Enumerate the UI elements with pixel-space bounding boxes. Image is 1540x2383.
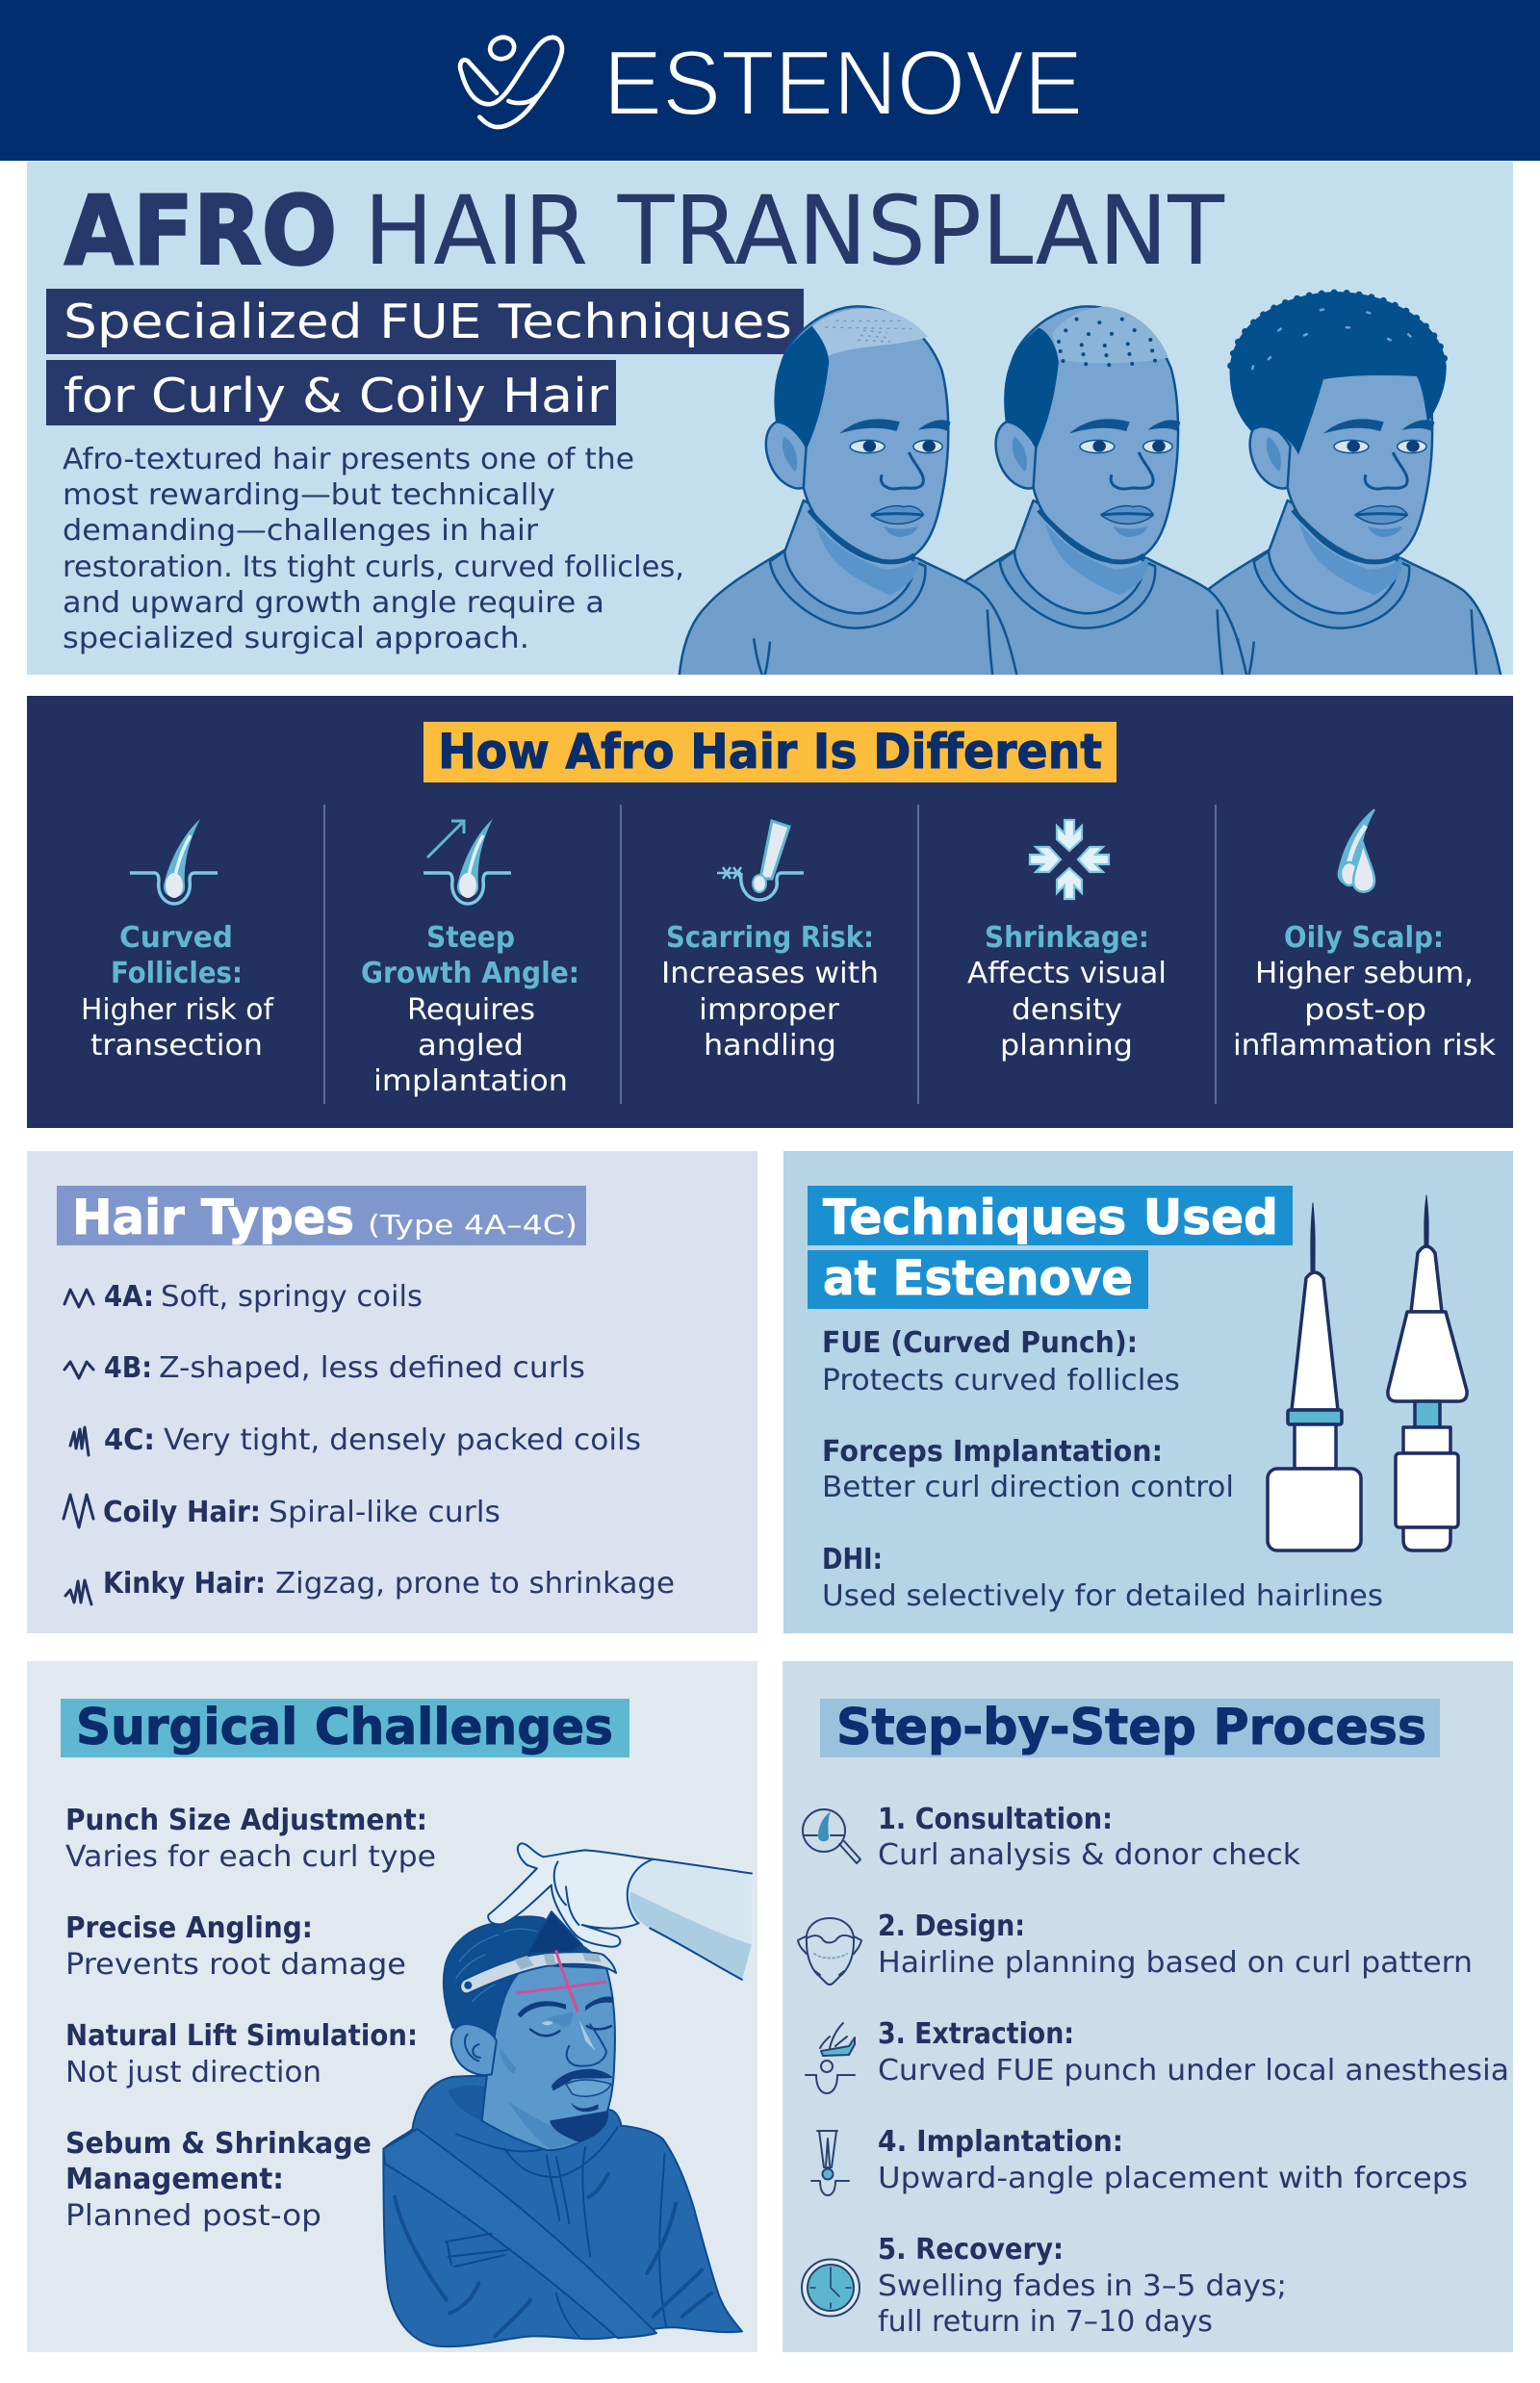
heading: Techniques Used <box>823 1190 1278 1245</box>
text: handling <box>704 1029 836 1063</box>
step 2: design: 2. Design: <box>878 1909 1025 1943</box>
item: sebum and shrinkage: Sebum & Shrinkage <box>65 2127 372 2161</box>
subtitle text: Specialized FUE Techniques <box>64 295 792 349</box>
step 4: implantation: Upward-angle placement with forceps <box>878 2162 1468 2195</box>
intro paragraph: most rewarding—but technically <box>63 478 555 512</box>
hoodie <box>383 2076 742 2346</box>
step 2: design <box>798 1909 1473 1985</box>
icon: angled follicle with arrow <box>424 819 511 904</box>
subtitle text: for Curly & Coily Hair <box>64 369 609 423</box>
panel: hair types <box>27 1151 757 1633</box>
text: planning <box>1000 1029 1133 1063</box>
heading: Step-by-Step Process <box>836 1699 1426 1756</box>
item: 4B: 4B: <box>104 1351 152 1385</box>
step 5: recovery <box>802 2233 1287 2339</box>
panel: techniques used <box>783 1151 1513 1633</box>
item: punch size: Punch Size Adjustment: <box>65 1804 427 1837</box>
item: kinky hair: Kinky Hair: <box>103 1567 266 1601</box>
text: Oily Scalp: <box>1284 921 1444 955</box>
icon: hair with oil drop <box>1339 809 1374 892</box>
brand name: ESTENOVE <box>603 32 1083 135</box>
text: angled <box>418 1029 524 1063</box>
text: Steep <box>426 921 515 955</box>
text: Curved <box>119 921 233 955</box>
icon: punch tool <box>1268 1203 1361 1550</box>
technique: FUE: FUE (Curved Punch): <box>822 1326 1138 1360</box>
heading: (Type 4A–4C) <box>368 1209 578 1241</box>
item: punch size <box>65 1804 436 1874</box>
face and neck <box>444 1916 615 2150</box>
item: sebum and shrinkage: Management: <box>65 2163 284 2196</box>
icon: exclamation over follicle with scar <box>717 821 804 900</box>
text: Affects visual <box>967 957 1167 990</box>
icon: head with hairline plan <box>798 1918 861 1985</box>
text: density <box>1012 993 1122 1027</box>
item: punch size: Varies for each curl type <box>65 1840 436 1874</box>
icon: curved follicle <box>130 819 218 904</box>
step 5: recovery: 5. Recovery: <box>878 2233 1064 2267</box>
step 1: consultation: 1. Consultation: <box>878 1803 1113 1836</box>
column: scarring risk <box>661 821 879 1063</box>
icon: implanter tool <box>1388 1195 1467 1550</box>
heading: at Estenove <box>823 1250 1133 1306</box>
text <box>967 921 1167 1063</box>
column: steep growth angle <box>361 819 579 1098</box>
step 1: consultation <box>803 1803 1301 1872</box>
item: natural lift: Natural Lift Simulation: <box>65 2019 418 2053</box>
technique: DHI: DHI: <box>822 1543 883 1576</box>
item: precise angling: Precise Angling: <box>65 1911 313 1945</box>
title: AFRO <box>64 176 337 287</box>
item: 4C: 4C: <box>104 1423 155 1457</box>
text: implantation <box>373 1064 568 1098</box>
text <box>1233 921 1497 1063</box>
heading: Surgical Challenges <box>76 1699 613 1756</box>
text <box>361 921 579 1098</box>
intro paragraph: specialized surgical approach. <box>63 622 529 655</box>
technique: DHI: Used selectively for detailed hairlines <box>822 1579 1383 1613</box>
icon: four inward arrows <box>1030 820 1109 899</box>
item: coily hair: Coily Hair: <box>103 1496 261 1529</box>
icon: implanter placing graft <box>811 2131 849 2195</box>
intro paragraph: demanding—challenges in hair <box>63 514 539 548</box>
step 4: implantation: 4. Implantation: <box>878 2125 1123 2159</box>
step 3: extraction <box>806 2017 1509 2093</box>
heading <box>808 1186 1293 1309</box>
text: Scarring Risk: <box>666 921 874 955</box>
step 3: extraction: 3. Extraction: <box>878 2017 1074 2051</box>
step 4: implantation <box>811 2125 1468 2195</box>
illustration: three men showing hair density stages <box>680 293 1502 677</box>
column: oily scalp <box>1233 809 1497 1063</box>
text: inflammation risk <box>1233 1029 1497 1063</box>
item: sebum and shrinkage: Planned post-op <box>65 2199 321 2233</box>
technique: forceps: Forceps Implantation: <box>822 1435 1163 1469</box>
icon: Estenove logo mark <box>460 34 562 127</box>
step 2: design: Hairline planning based on curl pattern <box>878 1946 1473 1980</box>
header banner <box>0 0 1540 161</box>
item: sebum and shrinkage <box>65 2127 372 2233</box>
text <box>81 921 274 1063</box>
icon: magnifier on follicle <box>803 1809 860 1863</box>
title: HAIR TRANSPLANT <box>364 176 1225 287</box>
item: natural lift: Not just direction <box>65 2056 321 2089</box>
step 5: recovery: full return in 7–10 days <box>878 2305 1213 2339</box>
headband <box>460 1952 616 1993</box>
gloved hand and sleeve <box>488 1843 752 1980</box>
item: precise angling <box>65 1911 406 1982</box>
column: curved follicles <box>81 819 274 1063</box>
illustration: patient with gloved hand measuring hairline <box>383 1843 752 2346</box>
icon: clock <box>802 2260 860 2316</box>
item: kinky hair <box>65 1567 675 1604</box>
text: Shrinkage: <box>985 921 1149 955</box>
heading: Hair Types <box>72 1190 354 1245</box>
text: improper <box>699 993 840 1027</box>
text: Higher risk of <box>81 993 274 1027</box>
item: coily hair <box>64 1495 500 1529</box>
text: post-op <box>1304 993 1426 1027</box>
item: 4A: Soft, springy coils <box>161 1280 423 1314</box>
text: Follicles: <box>111 957 243 990</box>
column dividers <box>324 805 1216 1104</box>
panel: surgical challenges <box>27 1661 757 2352</box>
item: 4B: Z-shaped, less defined curls <box>159 1351 585 1385</box>
technique: forceps: Better curl direction control <box>822 1471 1234 1504</box>
step 1: consultation: Curl analysis & donor check <box>878 1838 1301 1872</box>
heading: How Afro Hair Is Different <box>438 724 1102 780</box>
item: kinky hair: Zigzag, prone to shrinkage <box>275 1567 675 1601</box>
text <box>661 921 879 1063</box>
figure: receding hair and bald crown <box>680 306 1017 677</box>
technique: FUE: Protects curved follicles <box>822 1364 1180 1397</box>
item: precise angling: Prevents root damage <box>65 1948 406 1982</box>
item: natural lift <box>65 2019 418 2089</box>
intro paragraph: Afro-textured hair presents one of the <box>63 443 634 476</box>
intro paragraph <box>63 443 684 655</box>
subtitle text <box>64 295 792 423</box>
figure: short hair with thinning crown <box>964 305 1247 675</box>
panel: hero <box>27 162 1513 677</box>
technique: FUE <box>822 1326 1180 1397</box>
pink marking cross <box>518 1952 604 2011</box>
item: 4C: Very tight, densely packed coils <box>164 1423 641 1457</box>
column: shrinkage <box>967 820 1167 1063</box>
step 3: extraction: Curved FUE punch under local anesthesia <box>878 2054 1509 2088</box>
technique: forceps <box>822 1435 1234 1504</box>
subtitle badges <box>46 289 804 425</box>
panel: how afro hair is different <box>27 696 1513 1128</box>
heading <box>57 1186 586 1245</box>
intro paragraph: and upward growth angle require a <box>63 586 604 620</box>
text: Increases with <box>661 957 879 990</box>
text: Growth Angle: <box>361 957 579 990</box>
item: 4A: 4A: <box>104 1280 154 1314</box>
technique: DHI <box>822 1543 1383 1613</box>
panel: step-by-step process <box>783 1661 1513 2352</box>
text: Higher sebum, <box>1255 957 1474 990</box>
item: coily hair: Spiral-like curls <box>269 1496 500 1529</box>
step 5: recovery: Swelling fades in 3–5 days; <box>878 2269 1287 2303</box>
figure: full afro <box>1208 289 1502 675</box>
icon: tweezers extracting graft <box>806 2023 855 2093</box>
text: transection <box>90 1029 263 1063</box>
text: Requires <box>407 993 535 1027</box>
comb <box>527 1911 582 1954</box>
intro paragraph: restoration. Its tight curls, curved follicles, <box>63 551 684 584</box>
